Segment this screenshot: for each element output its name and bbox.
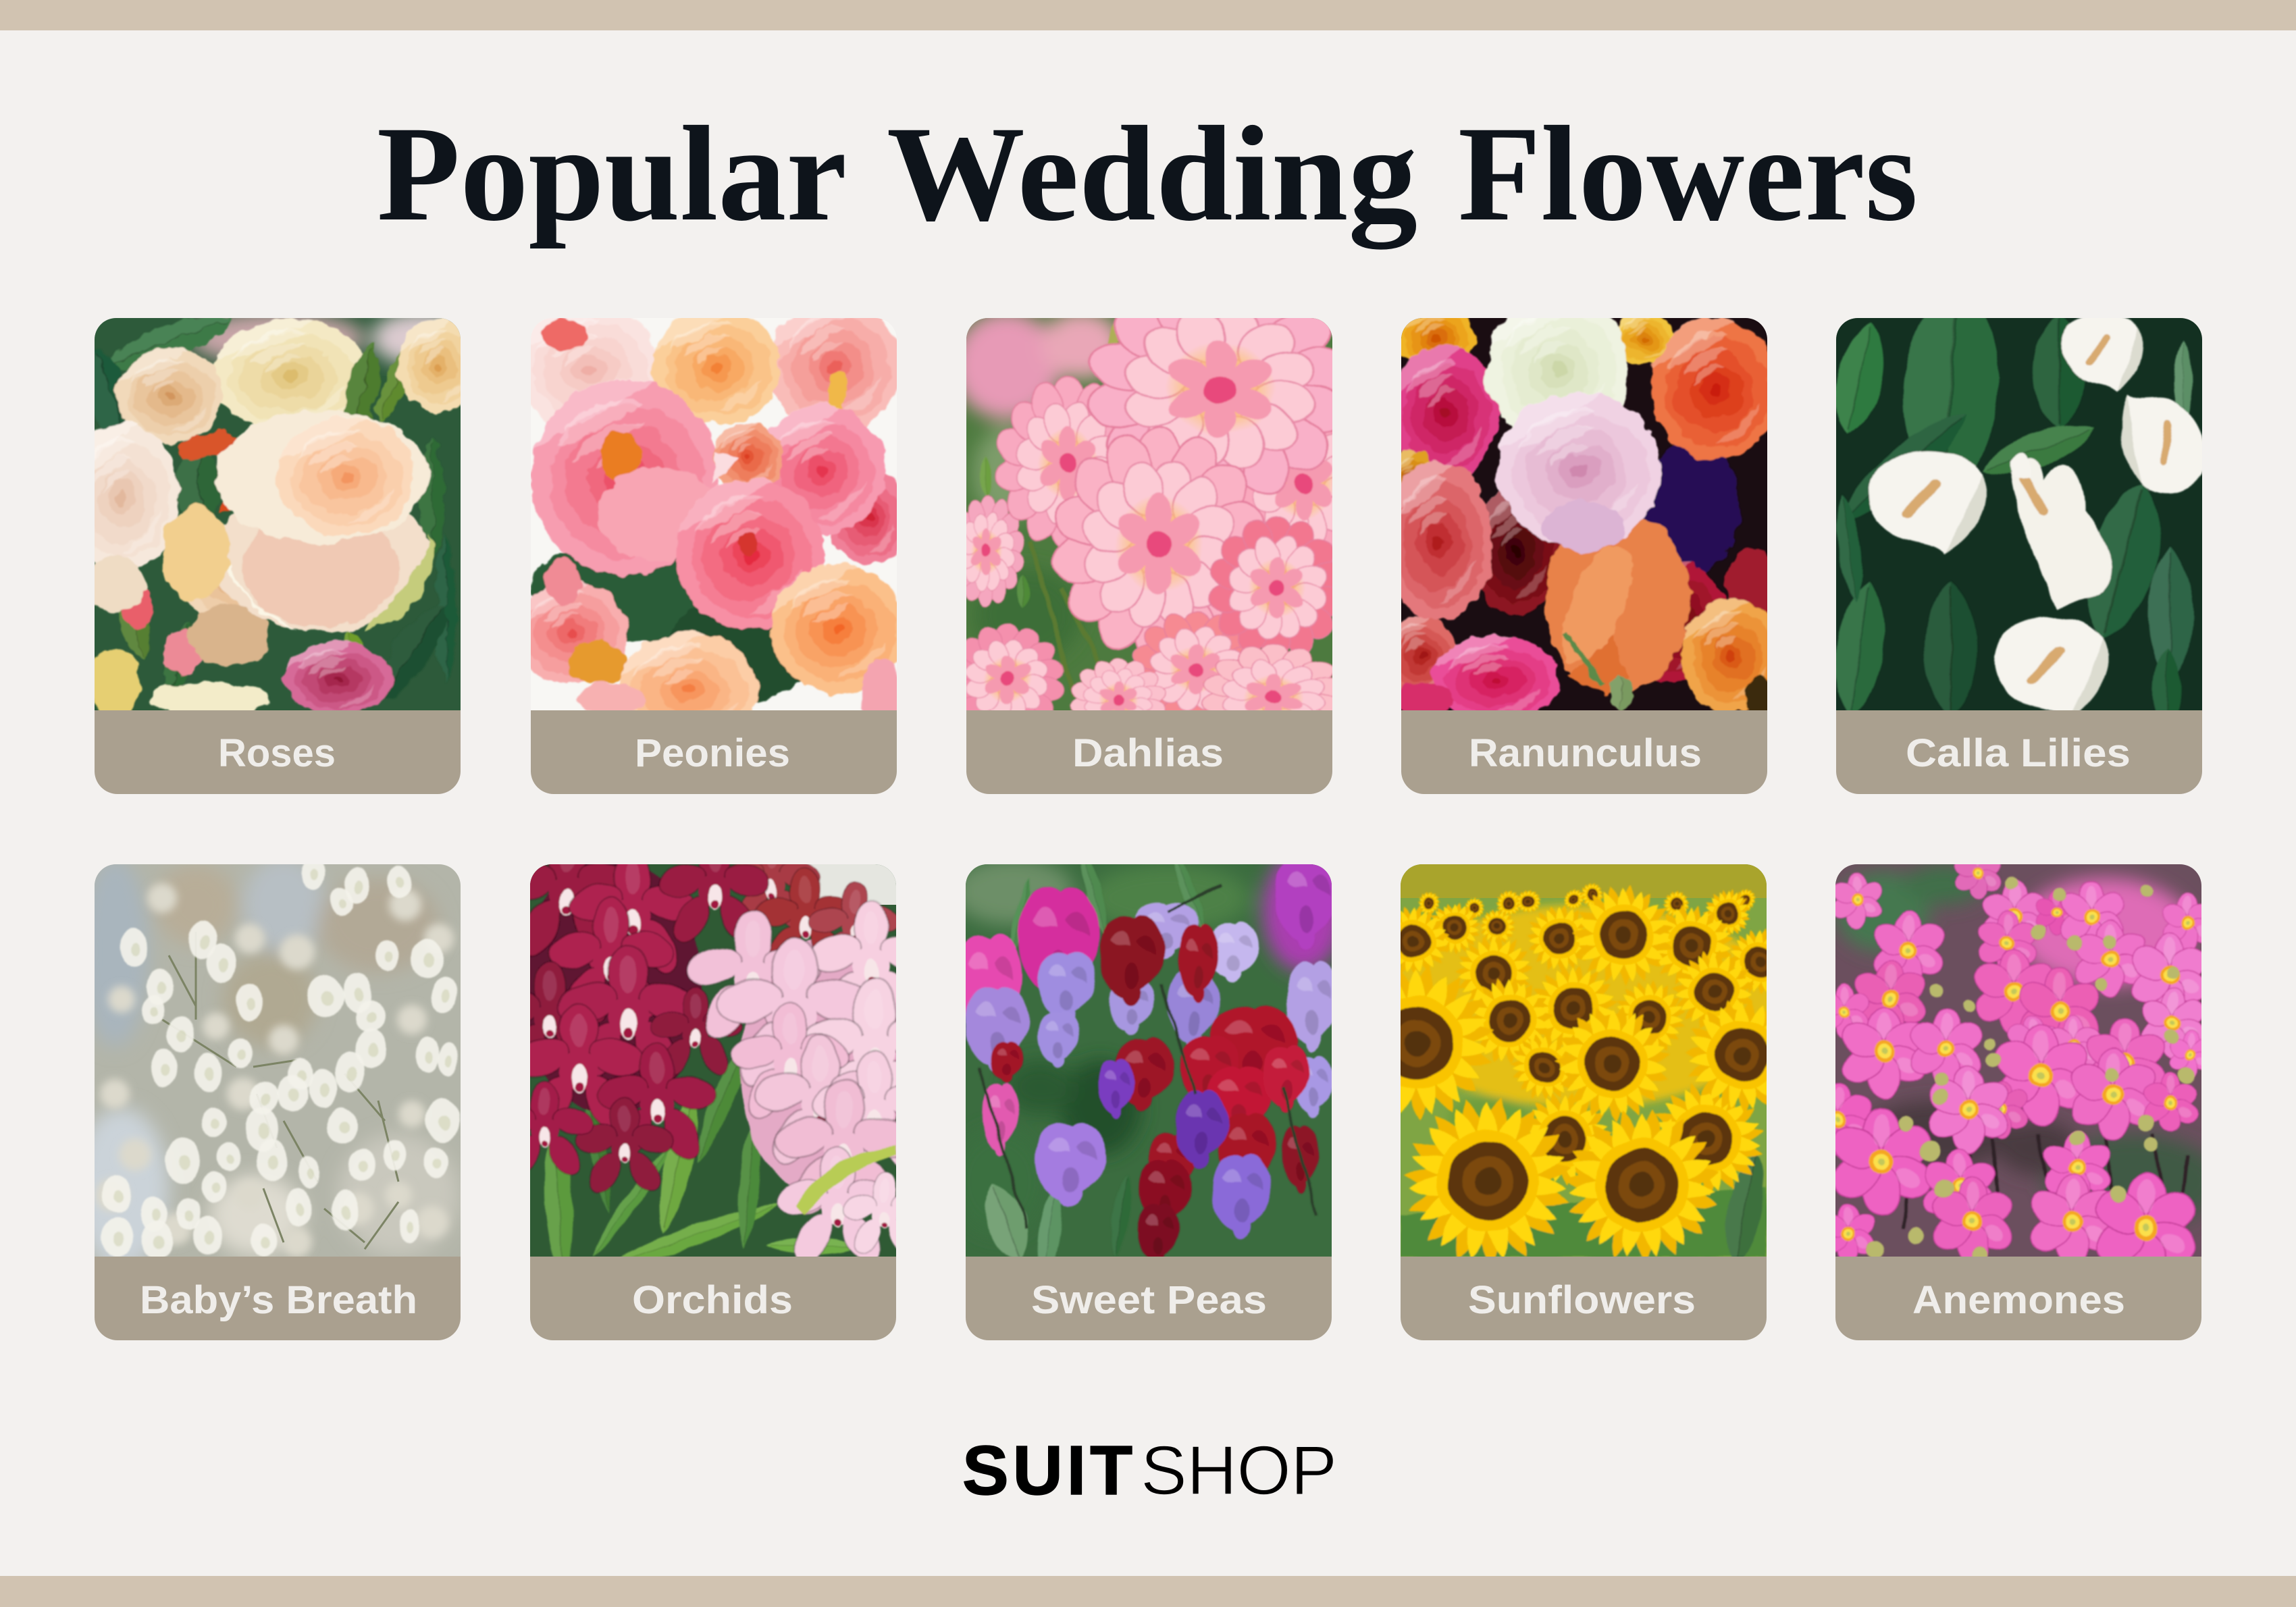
label bar	[966, 710, 1332, 794]
title	[377, 98, 1918, 249]
photo: dahlias	[966, 318, 1332, 710]
panel: orchids	[491, 826, 952, 1340]
flower name: Baby’s Breath	[140, 1278, 417, 1322]
photo: sunflowers	[1338, 864, 1800, 1268]
photo: anemones	[1801, 849, 2220, 1282]
panel: baby's breath	[74, 858, 461, 1340]
photo: peonies	[531, 318, 897, 710]
seed buds	[1866, 878, 2195, 1260]
panel: peonies	[531, 318, 897, 794]
label bar	[531, 710, 897, 794]
panel: anemones	[1801, 849, 2220, 1340]
flower name: Peonies	[635, 731, 790, 775]
label bar	[530, 1257, 896, 1340]
flower name: Ranunculus	[1469, 731, 1702, 775]
flower name: Sunflowers	[1468, 1278, 1696, 1322]
title: Popular	[377, 98, 847, 249]
bottom band	[0, 1576, 2296, 1607]
flower name: Roses	[218, 731, 336, 775]
photo: ranunculus	[1401, 318, 1767, 710]
label bar	[1836, 710, 2202, 794]
panel: ranunculus	[1401, 318, 1767, 794]
logo: SUITSHOP: SUIT	[962, 1431, 1132, 1509]
label bar	[1401, 1257, 1767, 1340]
flower name: Anemones	[1912, 1278, 2125, 1322]
label bar	[1401, 710, 1767, 794]
photo: baby's breath	[74, 858, 461, 1269]
flower name: Calla Lilies	[1906, 731, 2131, 775]
label bar	[1835, 1257, 2201, 1340]
logo: SUITSHOP: SHOP	[1141, 1431, 1337, 1509]
panel: calla lilies	[1836, 318, 2202, 794]
panel: dahlias	[966, 318, 1332, 794]
flower name: Sweet Peas	[1031, 1278, 1267, 1322]
logo: SUITSHOP	[962, 1431, 1337, 1509]
photo: sweet peas	[952, 844, 1344, 1281]
panel: roses	[95, 318, 461, 794]
label bar	[95, 710, 461, 794]
panel: sunflowers	[1338, 864, 1800, 1340]
label bar	[966, 1257, 1332, 1340]
title: Flowers	[1458, 98, 1918, 249]
photo: roses	[95, 318, 461, 710]
panel: sweet peas	[952, 844, 1344, 1340]
title: Wedding	[887, 98, 1417, 249]
top band	[0, 0, 2296, 30]
label bar	[95, 1257, 461, 1340]
photo: calla lilies	[1836, 318, 2202, 710]
flower name: Dahlias	[1072, 731, 1224, 775]
photo: orchids	[491, 826, 952, 1277]
flower name: Orchids	[632, 1278, 793, 1322]
